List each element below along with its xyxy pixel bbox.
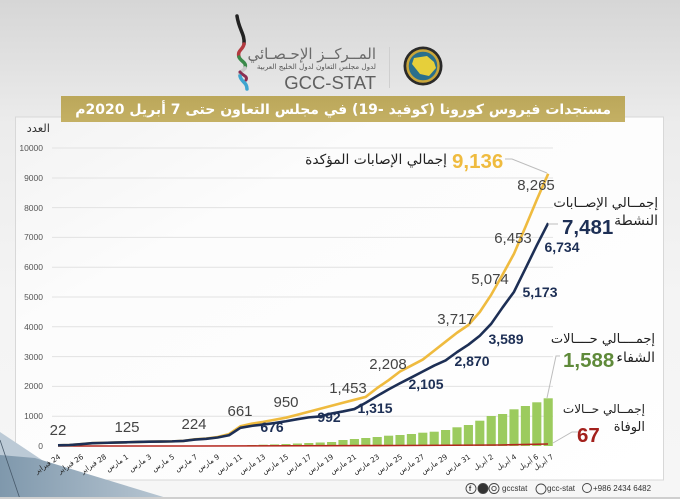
callout: total deaths: 67 [577,424,600,447]
data labels: active: 6,734 [544,239,580,255]
icon: ribbon [237,16,247,89]
data labels: active: 2,105 [408,376,444,392]
y axis and gridlines: 2000 [24,381,43,391]
header logo: GCC-STAT [237,16,376,93]
x axis date labels: 7 أبريل [531,451,555,472]
icon: GCC emblem [404,46,442,86]
y axis and gridlines: 3000 [24,352,43,362]
line: active cases [58,223,548,445]
footer contacts: gcc-stat [547,484,576,493]
y axis and gridlines: 9000 [24,173,43,183]
callout: total recovered: إجمــــالي حــــالات [551,332,655,347]
callout: total deaths [563,402,645,447]
callout: total deaths: الوفاة [614,420,645,435]
data labels: confirmed [50,177,555,439]
panel: chart area [16,117,664,480]
callout: total confirmed: إجمالي الإصابات المؤكدة [305,152,447,168]
x axis date labels: 7 مارس [173,452,199,473]
x axis date labels: 5 مارس [150,452,176,473]
x axis date labels: 25 مارس [374,452,404,476]
x axis date labels: 17 مارس [283,452,313,476]
data labels: confirmed: 661 [227,403,253,420]
callout: total active: إجمــالي الإصــابات [553,196,658,211]
footer contacts [466,484,652,494]
bar chart: recoveries [247,398,553,446]
title band [61,96,625,122]
callout: total recovered: 1,588 [563,349,614,372]
y axis and gridlines: 5000 [24,292,43,302]
footer text: gccstat [502,484,528,493]
data labels: confirmed: 22 [50,422,66,439]
x axis date labels [32,451,555,476]
logo arabic name: المــركــز الإحـصـائي [248,45,376,64]
x axis date labels: 31 مارس [442,452,472,476]
x axis date labels: 13 مارس [237,452,267,476]
data labels: confirmed: 950 [273,394,299,411]
y axis and gridlines: 8000 [24,203,43,213]
data labels: active [260,239,580,435]
leader lines [505,159,578,443]
y axis and gridlines: 6000 [24,262,43,272]
y axis and gridlines: 4000 [24,322,43,332]
footer contacts: +986 2434 6482 [593,484,652,493]
y axis and gridlines: 1000 [24,411,43,421]
x axis date labels: 1 مارس [104,452,130,473]
y axis and gridlines [19,143,553,451]
data labels: active: 992 [317,409,341,425]
data labels: active: 1,315 [357,400,393,416]
x axis date labels: 28 فبراير [78,452,108,476]
data labels: confirmed: 2,208 [369,356,407,373]
x axis date labels: 21 مارس [328,452,358,476]
x axis date labels: 9 مارس [195,452,221,473]
x axis date labels: 19 مارس [305,452,335,476]
data labels: confirmed: 224 [181,416,207,433]
callout: total active: 7,481 [562,216,613,239]
icon: social media [466,484,592,494]
callout: total deaths: إجمــالي حــالات [563,402,645,416]
x axis date labels: 27 مارس [396,452,426,476]
line: deaths [58,444,548,446]
divider [389,47,390,88]
x axis date labels: 3 مارس [127,452,153,473]
line: confirmed cases [58,174,548,445]
title text: مستجدات فيروس كورونا (كوفيد -19) في مجلس التعاون حتى 7 أبريل 2020م [75,100,611,118]
callout: total confirmed: 9,136 [452,150,503,173]
data labels: confirmed: 3,717 [437,311,475,328]
x axis date labels: 15 مارس [260,452,290,476]
logo latin name: GCC-STAT [284,72,376,93]
data labels: confirmed: 1,453 [329,380,367,397]
callout: total recovered: الشفاء [616,350,655,366]
corner decoration [0,432,170,499]
callout: total active: النشطة [614,213,658,229]
callout: total active [553,196,658,239]
y axis and gridlines: 7000 [24,232,43,242]
x axis date labels: 29 مارس [419,452,449,476]
data labels: active: 3,589 [488,331,524,347]
data labels: confirmed: 8,265 [517,177,555,194]
callout: total confirmed [305,150,503,173]
bottom strip [0,497,680,499]
data labels: active: 5,173 [522,284,558,300]
data labels: active: 676 [260,419,284,435]
data labels: active: 2,870 [454,353,490,369]
x axis date labels: 2 أبريل [471,451,495,472]
x axis date labels: 26 فبراير [55,452,85,476]
callout: total recovered [551,332,655,372]
y axis and gridlines: 10000 [19,143,43,153]
data labels: confirmed: 125 [114,419,140,436]
data labels: confirmed: 5,074 [471,271,509,288]
x axis date labels: 24 فبراير [32,452,62,476]
y axis and gridlines: 0 [38,441,43,451]
footer contacts: f [469,486,472,493]
x axis date labels: 6 أبريل [516,451,540,472]
data labels: confirmed: 6,453 [494,230,532,247]
x axis date labels: 23 مارس [351,452,381,476]
x axis date labels: 4 أبريل [494,451,518,472]
logo arabic subtitle: لدول مجلس التعاون لدول الخليج العربية [257,62,376,71]
x axis date labels: 11 مارس [214,452,244,476]
axis title: العدد [27,121,50,135]
